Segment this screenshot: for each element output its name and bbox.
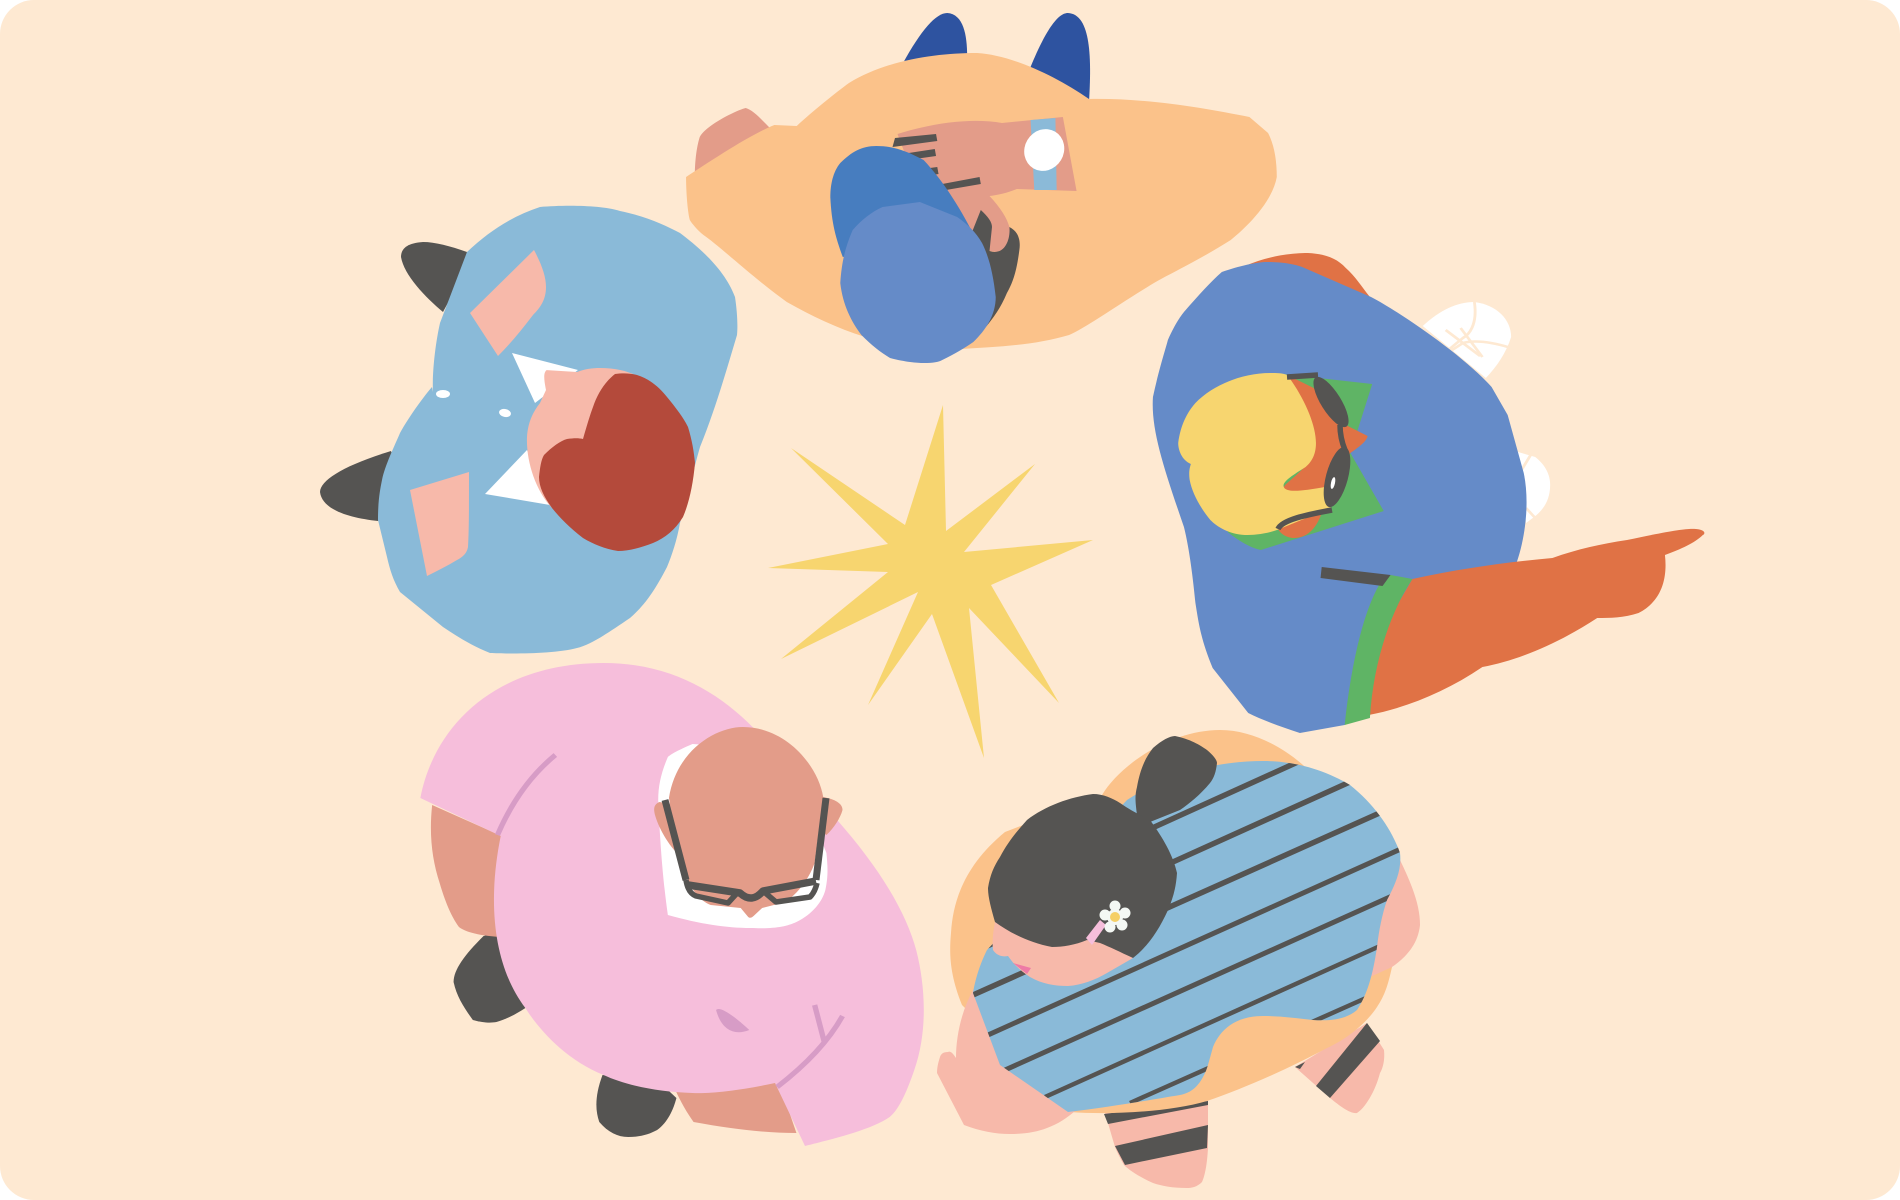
person: top, orange jacket — [686, 13, 1277, 363]
dress stripes — [973, 761, 1403, 1103]
face — [993, 920, 1133, 986]
watch face — [1021, 127, 1068, 173]
face — [1284, 375, 1368, 492]
person: bottom right, striped dress and ponytail — [937, 730, 1420, 1188]
left hand — [937, 990, 1075, 1134]
red hair — [539, 373, 695, 551]
shoes: blue — [902, 13, 1090, 102]
sunglasses — [1278, 372, 1356, 529]
shoes: dark — [320, 242, 467, 521]
shirt seams — [498, 755, 843, 1087]
ear right — [813, 797, 843, 835]
right leg with striped sock — [1295, 1023, 1384, 1113]
green cuff — [1345, 575, 1412, 725]
person: left, blue coat and red hair — [320, 206, 737, 653]
shirt body — [1153, 262, 1527, 733]
fingers gaps — [893, 134, 981, 190]
watch band — [1031, 118, 1057, 190]
pocket shadow — [716, 1009, 749, 1032]
bare arms — [431, 805, 796, 1133]
green collar — [1228, 374, 1384, 550]
dark shoes — [454, 930, 676, 1137]
shirt body — [420, 663, 924, 1146]
dark bag — [967, 210, 1020, 327]
pointing arm — [1369, 529, 1704, 715]
jacket body — [686, 53, 1277, 349]
flower — [1100, 900, 1130, 932]
coat body — [378, 206, 737, 653]
ear left — [654, 802, 684, 860]
mouth — [1013, 963, 1031, 974]
sleeve blue — [830, 146, 973, 257]
head: blue hair — [840, 202, 996, 363]
person: bottom left, pink shirt with glasses — [420, 663, 924, 1146]
left leg with striped sock — [1104, 1100, 1208, 1188]
white collar — [485, 353, 578, 505]
dress — [973, 761, 1400, 1112]
dark hair — [988, 794, 1177, 958]
ear — [1277, 512, 1322, 538]
hand with fingers and wristwatch — [893, 117, 1077, 252]
white collar — [658, 744, 828, 928]
bald head — [669, 727, 823, 918]
yellow hair — [1178, 373, 1331, 535]
hands — [410, 250, 546, 576]
central yellow star — [768, 405, 1093, 758]
strap — [1321, 567, 1391, 586]
glasses — [665, 798, 826, 903]
arm behind: orange — [1245, 253, 1370, 297]
face — [527, 368, 637, 508]
right arm — [1370, 860, 1420, 977]
hand behind jacket — [695, 108, 772, 178]
shoes: white with laces — [1423, 302, 1550, 523]
hair clip — [1086, 920, 1106, 945]
ponytail — [1136, 736, 1217, 822]
person: right, blue shirt and yellow hair — [1153, 253, 1704, 733]
buttons — [436, 390, 512, 418]
jacket back — [950, 730, 1400, 1113]
